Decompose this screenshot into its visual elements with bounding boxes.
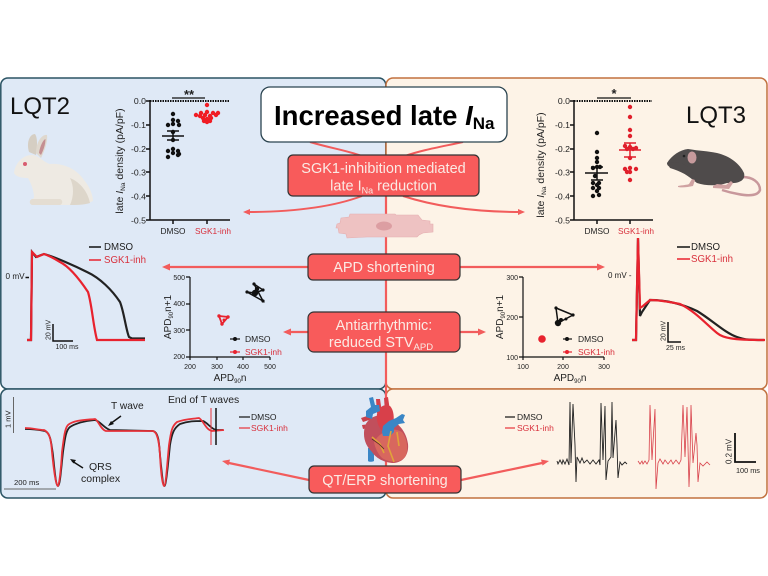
chart: LQT3 late INa dot plot: late I (535, 195, 547, 218)
chart: LQT3 ECG traces: SGK1-inh (517, 423, 554, 433)
chart: LQT2 late INa dot plot: Na (120, 182, 127, 191)
chart: LQT2 Poincare plot: SGK1-inh (245, 347, 282, 357)
chart: LQT3 late INa dot plot: * (611, 86, 617, 101)
chart: LQT2 action potential: 100 ms (56, 344, 79, 351)
chart: LQT2 action potential: DMSO (104, 242, 134, 253)
chart: LQT2 Poincare plot: 200 (173, 354, 185, 361)
callout: SGK1-inhibition: late I (330, 178, 362, 194)
chart: LQT3 late INa dot plot: 0.0 (558, 96, 570, 106)
chart: LQT2 late INa dot plot: -0.4 (131, 192, 146, 202)
chart: LQT2 Poincare plot: APD (214, 373, 234, 384)
chart: LQT2 late INa dot plot (114, 87, 231, 236)
chart: LQT3 Poincare plot: 90 (501, 311, 507, 319)
chart: LQT2 Poincare plot: n+1 (163, 294, 174, 312)
panel: LQT3 ECG (386, 389, 767, 498)
icon: cardiomyocyte (336, 214, 433, 238)
chart: LQT3 late INa dot plot: SGK1-inh (618, 226, 654, 236)
callout: SGK1-inhibition: SGK1-inhibition mediated (301, 161, 466, 177)
chart: LQT3 Poincare plot: 200 (506, 315, 518, 322)
chart: LQT2 late INa dot plot: ** (184, 87, 195, 102)
chart: LQT3 Poincare plot: 90 (574, 379, 581, 385)
chart: LQT3 action potential (608, 238, 765, 352)
chart: LQT2 late INa dot plot: late I (114, 191, 126, 214)
chart: LQT2 Poincare plot: 200 (184, 364, 196, 371)
chart: LQT3 Poincare plot: 100 (517, 364, 529, 371)
chart: LQT3 Poincare plot: n+1 (495, 294, 506, 312)
chart: LQT2 Poincare plot: 90 (234, 379, 241, 385)
chart: LQT3 Poincare plot: DMSO (578, 334, 604, 344)
panel: LQT3 action potentials and late INa (386, 78, 767, 389)
chart: LQT3 action potential: 25 ms (666, 345, 686, 352)
chart: LQT2 Poincare plot: 400 (237, 364, 249, 371)
chart: LQT2 late INa dot plot: -0.1 (131, 120, 146, 130)
chart: LQT2 ECG trace: 200 ms (14, 478, 39, 487)
chart: LQT2 Poincare plot: DMSO (245, 334, 271, 344)
chart: LQT2 late INa dot plot: DMSO (161, 226, 186, 236)
chart: LQT2 late INa dot plot: -0.3 (131, 168, 146, 178)
chart: LQT3 late INa dot plot: -0.2 (555, 144, 570, 154)
callout: SGK1-inhibition: reduction (373, 178, 437, 194)
callout: antiarrhythmic: reduced STV (329, 335, 414, 351)
icon: heart (361, 397, 408, 463)
chart: LQT2 Poincare plot: n (241, 373, 246, 384)
chart: LQT2 action potential: 0 mV (6, 272, 25, 281)
chart: LQT2 late INa dot plot: -0.2 (131, 144, 146, 154)
chart: LQT3 Poincare plot: 300 (598, 364, 610, 371)
heading: LQT3: LQT3 (686, 102, 746, 129)
chart: LQT2 ECG trace (4, 395, 288, 489)
icon: rabbit (14, 134, 93, 205)
chart: LQT3 late INa dot plot: -0.1 (555, 120, 570, 130)
chart: LQT3 late INa dot plot: -0.3 (555, 168, 570, 178)
chart: LQT3 Poincare plot: APD (554, 373, 574, 384)
chart: LQT2 ECG trace: End of T waves (168, 395, 239, 406)
callout: antiarrhythmic: APD (414, 342, 433, 353)
chart: LQT2 ECG trace: SGK1-inh (251, 423, 288, 433)
title box (261, 87, 507, 142)
chart: LQT2 ECG trace: DMSO (251, 412, 277, 422)
chart: LQT3 action potential: SGK1-inh (691, 254, 733, 265)
chart: LQT2 ECG trace: 1 mV (4, 410, 12, 428)
chart: LQT3 late INa dot plot: -0.4 (555, 192, 570, 202)
chart: LQT3 Poincare plot: n (581, 373, 586, 384)
chart: LQT3 action potential: 20 mV (660, 320, 668, 341)
chart: LQT2 Poincare plot: 500 (264, 364, 276, 371)
panel: LQT2 action potentials and late INa (1, 78, 386, 389)
callout: SGK1-inhibition: Na (362, 186, 373, 196)
heading: LQT2: LQT2 (10, 93, 70, 120)
chart: LQT2 Poincare plot: 400 (173, 301, 185, 308)
chart: LQT3 late INa dot plot: DMSO (585, 226, 610, 236)
callout: SGK1-inhibition (288, 155, 479, 196)
chart: LQT3 late INa dot plot (535, 86, 654, 236)
chart: LQT3 Poincare plot: 300 (506, 275, 518, 282)
chart: LQT3 ECG traces (505, 402, 760, 489)
chart: LQT2 ECG trace: QRS (89, 461, 112, 473)
chart: LQT3 Poincare plot: 100 (506, 355, 518, 362)
chart: LQT3 late INa dot plot: -0.5 (555, 216, 570, 226)
chart: LQT3 late INa dot plot: Na (541, 186, 548, 195)
chart: LQT3 Poincare plot (495, 275, 615, 385)
chart: LQT3 action potential: 0 mV - (608, 271, 632, 280)
chart: LQT2 late INa dot plot: 0.0 (134, 96, 146, 106)
chart: LQT2 ECG trace: T wave (111, 401, 144, 412)
chart: LQT2 action potential (6, 242, 146, 351)
title box: Increased late I (274, 100, 473, 131)
callout: APD shortening (308, 254, 460, 280)
callout: APD shortening: APD shortening (333, 260, 435, 276)
icon: mouse (667, 149, 760, 195)
chart: LQT3 late INa dot plot: density (pA/pF) (535, 112, 547, 187)
connector lines and curves (168, 142, 600, 480)
chart: LQT2 Poincare plot: 300 (211, 364, 223, 371)
chart: LQT3 ECG traces: 100 ms (736, 466, 760, 475)
callout: QT/ERP shortening (309, 466, 461, 493)
chart: LQT2 Poincare plot: 90 (169, 311, 175, 319)
title box: Na (473, 114, 495, 133)
chart: LQT2 late INa dot plot: SGK1-inh (195, 226, 231, 236)
chart: LQT3 ECG traces: 0.2 mV (724, 438, 734, 464)
chart: LQT2 Poincare plot (163, 275, 282, 385)
callout: QT/ERP shortening: QT/ERP shortening (322, 473, 448, 489)
chart: LQT2 action potential: SGK1-inh (104, 255, 146, 266)
panel: LQT2 ECG (1, 389, 386, 498)
chart: LQT2 Poincare plot: 500 (173, 275, 185, 282)
chart: LQT2 ECG trace: complex (81, 473, 121, 485)
chart: LQT2 late INa dot plot: -0.5 (131, 216, 146, 226)
chart: LQT3 Poincare plot: SGK1-inh (578, 347, 615, 357)
chart: LQT2 Poincare plot: APD (163, 319, 174, 339)
chart: LQT3 action potential: DMSO (691, 242, 721, 253)
chart: LQT2 Poincare plot: 300 (173, 328, 185, 335)
callout: antiarrhythmic (308, 312, 460, 353)
chart: LQT3 Poincare plot: 200 (557, 364, 569, 371)
callout: antiarrhythmic: Antiarrhythmic: (336, 318, 432, 334)
chart: LQT2 action potential: 20 mV (46, 319, 52, 340)
chart: LQT3 ECG traces: DMSO (517, 412, 543, 422)
chart: LQT3 Poincare plot: APD (495, 319, 506, 339)
chart: LQT2 late INa dot plot: density (pA/pF) (114, 108, 126, 183)
